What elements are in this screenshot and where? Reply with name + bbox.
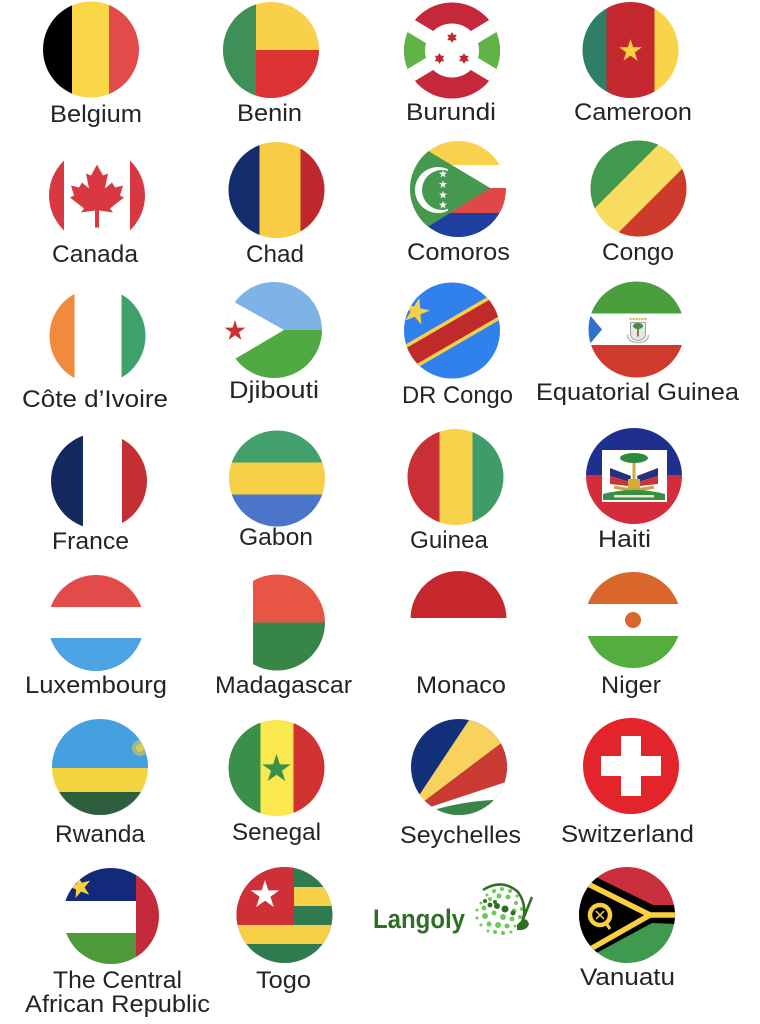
card: Madagascar	[215, 574, 352, 699]
label: Togo: Togo	[256, 967, 311, 994]
flag: Congo	[590, 140, 686, 236]
flag: Vanuatu	[567, 863, 677, 969]
flag: DR Congo	[404, 282, 500, 378]
label: Benin: Benin	[237, 100, 302, 127]
card: Gabon	[229, 430, 325, 551]
label: Senegal: Senegal	[232, 819, 321, 846]
flag: Niger	[585, 571, 681, 669]
flag: Luxembourg	[48, 575, 144, 671]
card: Burundi	[404, 2, 500, 120]
label: Congo: Congo	[602, 239, 674, 266]
label: Burundi: Burundi	[406, 99, 496, 126]
logo icon: dotted golf ball and club	[476, 884, 532, 935]
card: Senegal	[228, 720, 324, 846]
label: Cameroon: Cameroon	[574, 99, 692, 126]
card: Canada	[49, 160, 145, 262]
card: Rwanda	[52, 719, 148, 848]
logo wordmark: Langoly	[373, 904, 465, 934]
card: Djibouti	[218, 282, 322, 404]
label: Niger: Niger	[601, 672, 661, 699]
card: Togo	[236, 867, 332, 994]
card: Congo	[590, 140, 686, 266]
flag: Cote d'Ivoire	[50, 294, 146, 378]
card: Luxembourg	[25, 575, 167, 699]
card: Equatorial Guinea	[536, 282, 740, 406]
flag: France	[51, 433, 147, 529]
flag: Rwanda	[52, 719, 148, 815]
card: Guinea	[408, 429, 504, 554]
label: Haiti: Haiti	[598, 526, 651, 553]
card: Monaco	[410, 571, 506, 699]
flag: Madagascar	[253, 574, 325, 670]
label: Chad: Chad	[246, 241, 304, 268]
card: DR Congo	[404, 282, 512, 408]
flag: Cameroon	[582, 2, 678, 98]
flag: Seychelles	[406, 693, 536, 827]
label: Comoros: Comoros	[407, 239, 510, 266]
flag: Monaco	[410, 571, 506, 618]
card: Switzerland	[561, 718, 694, 848]
flag: Belgium	[43, 2, 139, 98]
card: Cote d'Ivoire	[23, 294, 167, 407]
label: Canada: Canada	[52, 241, 139, 268]
card: Comoros	[407, 140, 510, 266]
label: Djibouti: Djibouti	[229, 377, 319, 404]
flag: Haiti	[586, 428, 682, 524]
label: Rwanda: Rwanda	[55, 821, 146, 848]
card: Benin	[223, 2, 319, 127]
label: Madagascar: Madagascar	[215, 672, 352, 699]
flag: Benin	[223, 2, 319, 98]
label: Equatorial Guinea: Equatorial Guinea	[536, 379, 740, 406]
card: France	[51, 433, 147, 555]
flag: Djibouti	[218, 282, 322, 378]
flag: Burundi	[404, 2, 500, 98]
logo: Langoly	[373, 884, 532, 935]
flag: Guinea	[408, 429, 504, 525]
label: Cote d'Ivoire: Côte d’Ivoire	[22, 386, 168, 413]
flag: Switzerland	[583, 718, 679, 814]
card: Seychelles	[400, 693, 536, 849]
label: DR Congo: DR Congo	[402, 382, 513, 409]
card: Chad	[228, 142, 324, 268]
flag: Togo	[236, 867, 332, 963]
label: The Central African Republic: The Central	[53, 967, 182, 994]
flag: Equatorial Guinea	[588, 282, 684, 378]
label: Luxembourg: Luxembourg	[25, 672, 167, 699]
card: Cameroon	[574, 2, 692, 126]
flag: Gabon	[229, 430, 325, 526]
flag: Canada	[49, 160, 145, 230]
card: Belgium	[43, 2, 142, 128]
label: The Central African Republic: African Republic	[25, 991, 210, 1018]
label: Belgium: Belgium	[50, 101, 142, 128]
card: Niger	[585, 571, 681, 699]
label: Guinea: Guinea	[410, 527, 489, 554]
label: Switzerland: Switzerland	[561, 821, 694, 848]
label: Gabon: Gabon	[239, 524, 313, 551]
label: Vanuatu: Vanuatu	[580, 964, 675, 991]
card: Haiti	[586, 428, 682, 553]
card: Vanuatu	[567, 863, 677, 991]
label: France: France	[52, 528, 129, 555]
flag: The Central African Republic	[63, 868, 159, 964]
card: The Central African Republic	[25, 868, 210, 1018]
flag: Chad	[228, 142, 324, 238]
flag: Senegal	[228, 720, 324, 816]
label: Seychelles: Seychelles	[400, 822, 521, 849]
label: Monaco: Monaco	[416, 672, 506, 699]
flag: Comoros	[410, 140, 506, 238]
